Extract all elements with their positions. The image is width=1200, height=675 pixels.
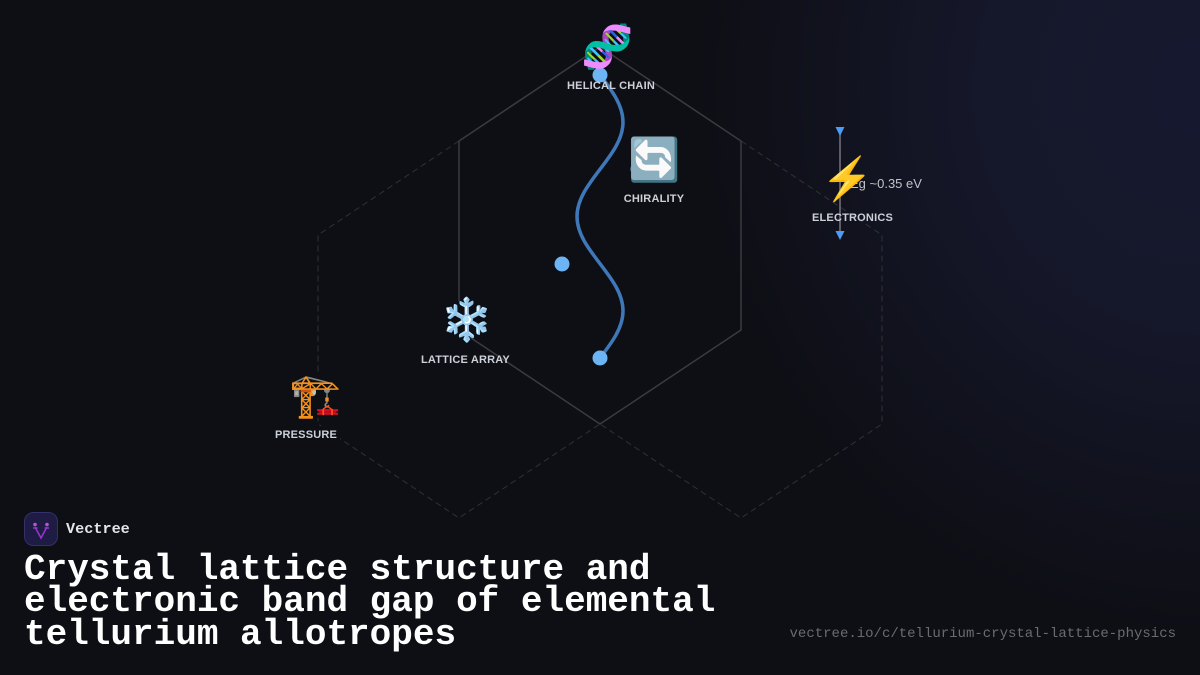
band gap value: Eg ~0.35 eV [850,176,922,191]
brand name: Vectree [66,520,130,538]
band gap arrow [836,127,844,240]
node: chirality [624,135,685,205]
title: tellurium allotropes [24,614,456,655]
node: electronics: ELECTRONICS [812,212,893,224]
brand [24,512,130,546]
icon: vectree logo [24,512,58,546]
title: Crystal lattice structure and [24,549,651,590]
node: pressure: 🏗️ [289,372,341,421]
node: chirality: 🔄 [628,135,680,185]
node: helical chain: 🧬 [581,21,633,72]
node: electronics: ⚡ [821,154,873,204]
title [24,549,715,655]
source url: vectree.io/c/tellurium-crystal-lattice-physics [790,626,1176,642]
node: helical chain: HELICAL CHAIN [567,80,655,92]
helical chain curve [577,75,623,358]
title: electronic band gap of elemental [24,581,715,622]
node: pressure: PRESSURE [275,429,337,441]
node: chirality: CHIRALITY [624,193,685,205]
node: electronics [812,154,893,224]
node: pressure [275,372,341,441]
node: lattice array [421,295,510,366]
node: helical chain [567,21,655,92]
atom nodes [554,68,646,366]
node: lattice array: ❄️ [440,295,493,345]
node: lattice array: LATTICE ARRAY [421,354,510,366]
central hexagon [459,47,741,424]
